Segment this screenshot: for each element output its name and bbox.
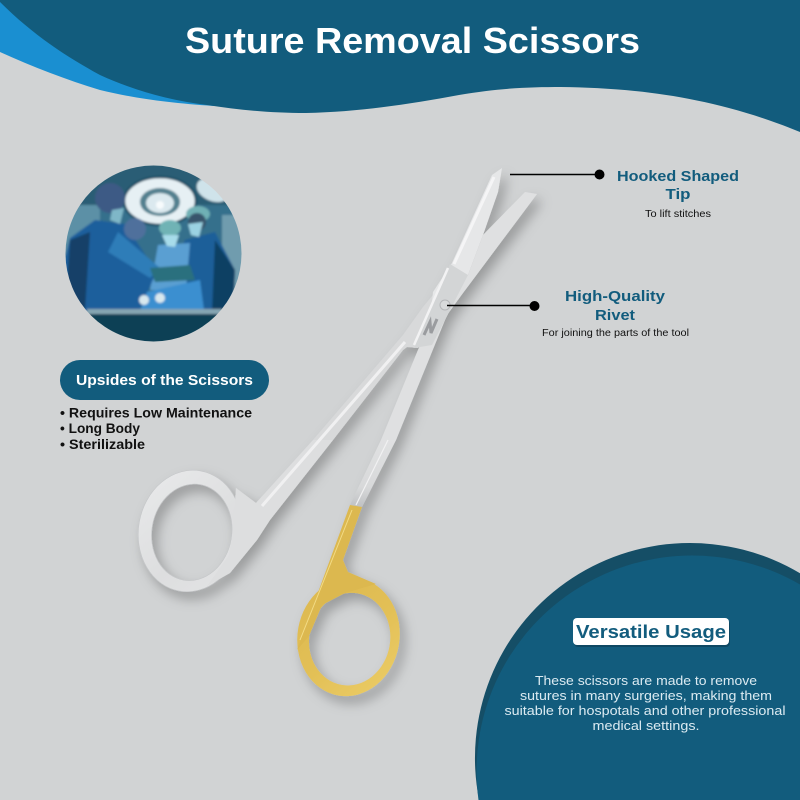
upsides list [60,404,252,452]
title: Suture Removal Scissors [185,20,640,61]
surgeon centre [150,220,190,290]
header wave: light blue accent [0,0,260,106]
box lock [414,264,468,348]
gold-handled shaft [350,440,396,507]
header wave: dark blue banner [0,0,800,132]
usage description: sutures in many surgeries, making them [520,688,772,703]
callout: hooked shaped tip: Hooked Shaped [617,168,739,185]
callout: high-quality rivet [542,288,689,339]
surgeon left [62,183,160,312]
panel: versatile usage [475,543,800,800]
pill heading: upsides: Upsides of the Scissors [76,372,253,389]
callout: high-quality rivet: Rivet [595,307,635,324]
arm and tools at centre [150,265,195,282]
usage description: These scissors are made to remove [535,673,757,688]
second blade and shaft [381,192,537,440]
usage description [504,673,786,733]
drape and table [140,280,204,311]
icon: second lamp [194,178,225,204]
callout: hooked shaped tip [617,168,739,220]
callout line: rivet [447,301,540,311]
photo: surgeons in operating room [66,166,242,342]
pill heading: upsides [60,360,269,400]
callout: hooked shaped tip: Tip [666,186,690,203]
callout: hooked shaped tip: To lift stitches [645,209,711,220]
upsides list: • Long Body [60,420,140,436]
scissors [129,168,537,704]
heading: versatile usage [573,618,730,647]
usage description: medical settings. [592,718,700,733]
silver arm and handle [129,295,440,600]
gold handle [288,505,409,704]
callout: high-quality rivet: For joining the parts of the tool [542,328,689,339]
callout: high-quality rivet: High-Quality [565,288,666,305]
surgeon right [184,204,236,310]
usage description: suitable for hospotals and other professional [504,703,786,718]
heading: versatile usage: Versatile Usage [576,622,726,642]
equipment at right [220,214,242,293]
upsides list: • Sterilizable [60,436,145,452]
callout line: hooked tip [510,170,604,180]
icon: surgical lamp [124,177,196,225]
blade highlight [454,177,494,264]
upsides list: • Requires Low Maintenance [60,404,252,420]
hooked blade [430,168,502,320]
